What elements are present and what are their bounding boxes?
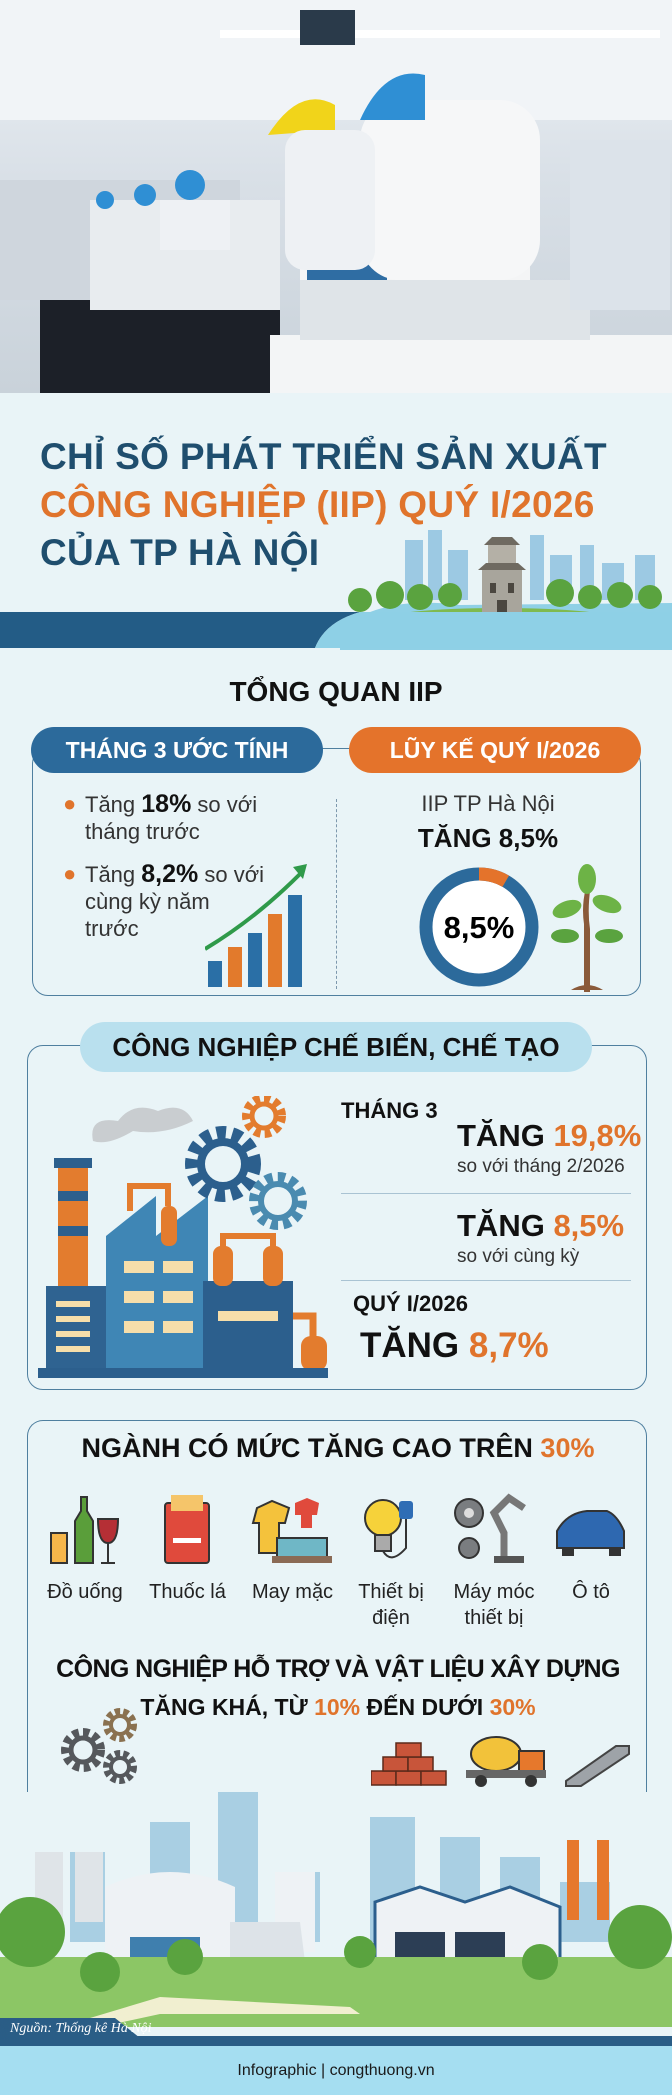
bullet list: cùng kỳ năm xyxy=(85,889,210,914)
title: CỦA TP HÀ NỘI xyxy=(40,532,319,573)
cigarettes xyxy=(165,1495,209,1563)
panel: industries: TĂNG KHÁ, TỪ 10% ĐẾN DƯỚI 30% xyxy=(140,1694,536,1720)
icon labels: Thuốc lá xyxy=(149,1581,226,1603)
car xyxy=(557,1511,624,1556)
icon row xyxy=(50,1494,625,1564)
illustration: industrial city xyxy=(0,1792,672,2046)
bullet list: Tăng 18% so với xyxy=(85,790,257,818)
footer: Infographic | congthuong.vn xyxy=(237,2062,435,2079)
icon: gears xyxy=(61,1708,137,1784)
drinks xyxy=(51,1497,118,1563)
cumulative text xyxy=(418,791,558,853)
bullet list: ● xyxy=(63,791,76,816)
electrical xyxy=(365,1500,413,1557)
machinery xyxy=(455,1498,524,1563)
pill: lũy kế quý I/2026 xyxy=(349,727,641,773)
title: CÔNG NGHIỆP (IIP) QUÝ I/2026 xyxy=(40,484,595,525)
panel: công nghiệp chế biến, chế tạo: TĂNG 19,8% xyxy=(457,1118,641,1153)
bullet list: trước xyxy=(85,916,139,941)
icon labels: Đồ uống xyxy=(47,1581,123,1603)
cumulative text: IIP TP Hà Nội xyxy=(421,791,555,816)
pill: tháng 3 ước tính xyxy=(31,727,323,773)
panel: công nghiệp chế biến, chế tạo xyxy=(27,1045,647,1390)
cumulative text: TĂNG 8,5% xyxy=(418,823,558,853)
panel: công nghiệp chế biến, chế tạo: so với tháng 2/2026 xyxy=(457,1156,625,1177)
icons: bricks, mixer truck, steel beam xyxy=(371,1736,630,1787)
panel: công nghiệp chế biến, chế tạo: TĂNG 8,5% xyxy=(457,1208,624,1243)
icon labels: thiết bị xyxy=(465,1607,523,1629)
panel: công nghiệp chế biến, chế tạo: TĂNG 8,7% xyxy=(360,1326,549,1365)
heading: công nghiệp hỗ trợ: CÔNG NGHIỆP HỖ TRỢ VÀ VẬT LIỆU XÂY DỰNG xyxy=(56,1655,620,1683)
donut chart xyxy=(420,868,538,986)
clothing xyxy=(253,1498,332,1563)
bullet list: tháng trước xyxy=(85,819,200,844)
icon labels: Máy móc xyxy=(453,1581,535,1603)
pill heading: công nghiệp chế biến xyxy=(80,1022,592,1072)
title: CHỈ SỐ PHÁT TRIỂN SẢN XUẤT xyxy=(40,436,607,477)
pill: lũy kế quý I/2026: LŨY KẾ QUÝ I/2026 xyxy=(390,737,600,763)
source note: Nguồn: Thống kê Hà Nội xyxy=(10,2021,152,2036)
bullet list: ● xyxy=(63,861,76,886)
donut chart: 8,5% xyxy=(444,910,514,945)
panel: industries xyxy=(27,1420,647,1792)
stats: tháng 3: THÁNG 3 xyxy=(341,1098,438,1123)
icon labels: May mặc xyxy=(252,1581,333,1603)
heading: ngành tăng cao: NGÀNH CÓ MỨC TĂNG CAO TRÊN 30% xyxy=(82,1433,594,1463)
title xyxy=(40,436,607,573)
title band xyxy=(0,612,620,648)
title illustration: Hanoi skyline and turtle tower xyxy=(340,530,672,650)
bullet list: Tăng 8,2% so với xyxy=(85,860,264,888)
bar chart with growth arrow xyxy=(205,864,307,987)
panel: công nghiệp chế biến, chế tạo: so với cùng kỳ xyxy=(457,1246,579,1267)
stats: quý I/2026: QUÝ I/2026 xyxy=(353,1291,468,1316)
heading: tổng quan IIP: TỔNG QUAN IIP xyxy=(229,676,443,707)
icon labels: điện xyxy=(372,1607,410,1629)
bullet list xyxy=(63,790,264,941)
pill: tháng 3 ước tính: THÁNG 3 ƯỚC TÍNH xyxy=(66,737,288,763)
pill heading: công nghiệp chế biến: CÔNG NGHIỆP CHẾ BIẾN, CHẾ TẠO xyxy=(112,1032,560,1062)
panel: overview xyxy=(32,748,641,996)
icon: factory with gears xyxy=(38,1096,328,1378)
footer xyxy=(0,2046,672,2095)
icon labels xyxy=(47,1580,610,1629)
dashed divider xyxy=(336,799,337,989)
hero photo: factory workers xyxy=(0,0,672,393)
icon: growing tree xyxy=(551,864,623,992)
icon labels: Ô tô xyxy=(572,1581,610,1603)
icon labels: Thiết bị xyxy=(358,1581,424,1603)
